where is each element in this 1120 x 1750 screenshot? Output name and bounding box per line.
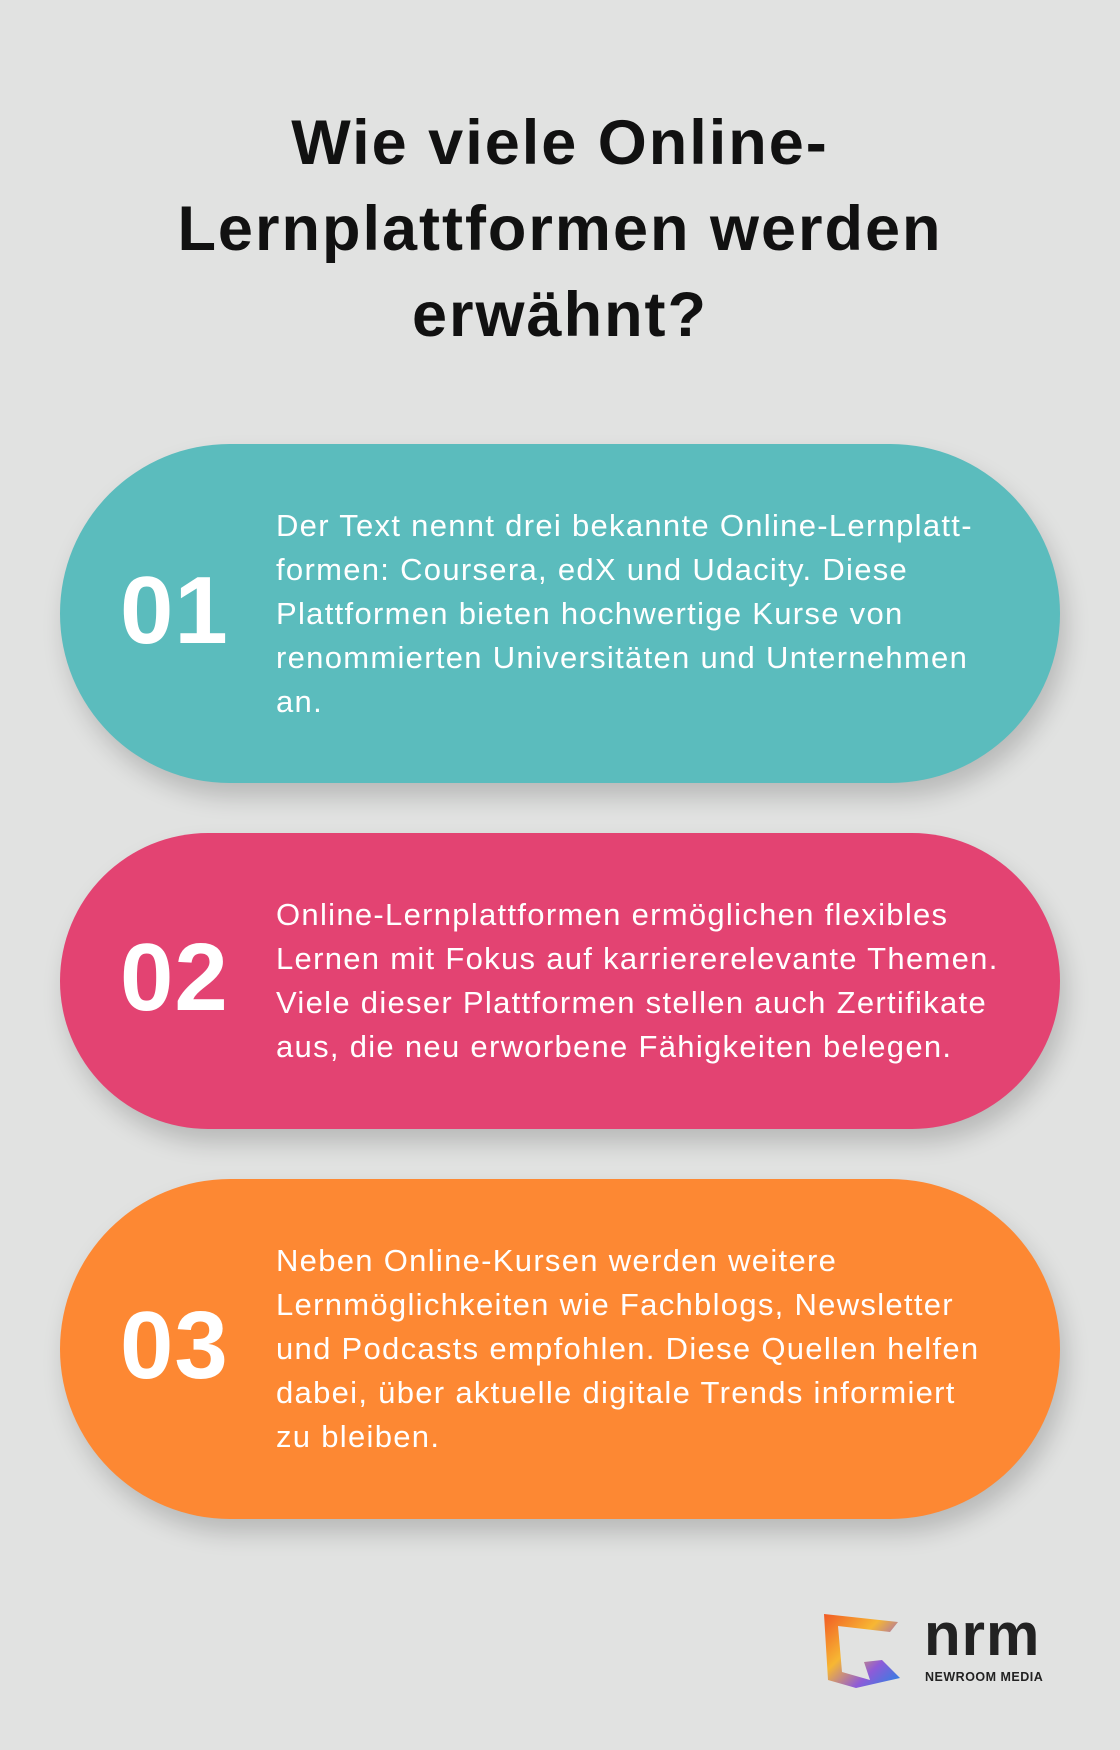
panel: 03 <box>60 1179 1060 1519</box>
text 02: aus, die neu erworbene Fähigkeiten belegen. <box>276 1029 952 1064</box>
title: erwähnt? <box>412 280 708 350</box>
panel: 02 <box>60 833 1060 1129</box>
text 03: und Podcasts empfohlen. Diese Quellen helfen <box>276 1331 979 1366</box>
title <box>177 108 943 350</box>
text 03: Neben Online-Kursen werden weitere <box>276 1243 837 1278</box>
number 02: 02 <box>120 924 229 1031</box>
text 01 <box>276 508 973 719</box>
text 02: Viele dieser Plattformen stellen auch Zertifikate <box>276 985 987 1020</box>
title: Lernplattformen werden <box>177 194 943 264</box>
text 01: Plattformen bieten hochwertige Kurse von <box>276 596 904 631</box>
text 03: Lernmöglichkeiten wie Fachblogs, Newsletter <box>276 1287 954 1322</box>
number 01: 01 <box>120 557 229 664</box>
text 03: zu bleiben. <box>276 1419 440 1454</box>
logo: NEWROOM MEDIA <box>925 1670 1043 1684</box>
title: Wie viele Online- <box>291 108 829 178</box>
text 02 <box>276 897 999 1064</box>
icon: logo mark <box>824 1614 900 1688</box>
panel: 01 <box>60 444 1060 783</box>
logo text: nrm <box>924 1601 1040 1668</box>
text 01: formen: Coursera, edX und Udacity. Diese <box>276 552 908 587</box>
text 01: an. <box>276 684 323 719</box>
text 02: Lernen mit Fokus auf karriererelevante Themen. <box>276 941 999 976</box>
text 01: Der Text nennt drei bekannte Online-Lernplatt- <box>276 508 973 543</box>
text 03 <box>276 1243 979 1454</box>
number 03: 03 <box>120 1292 229 1399</box>
text 03: dabei, über aktuelle digitale Trends informiert <box>276 1375 956 1410</box>
logo <box>824 1601 1043 1688</box>
text 02: Online-Lernplattformen ermöglichen flexibles <box>276 897 948 932</box>
text 01: renommierten Universitäten und Unternehmen <box>276 640 968 675</box>
